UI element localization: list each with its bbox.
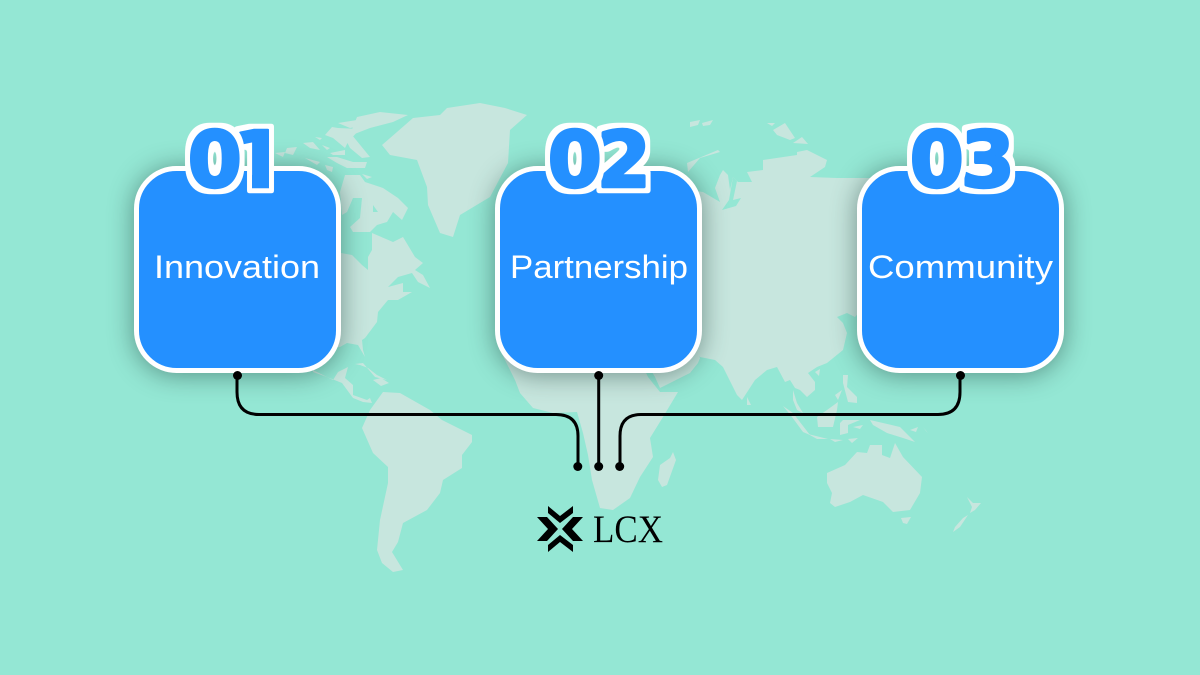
number 0 of 01: 0 bbox=[188, 116, 242, 206]
panel: community bbox=[860, 116, 1062, 370]
label: partnership: Partnership bbox=[510, 249, 688, 285]
number 0 of 03: 0 bbox=[910, 116, 964, 206]
label: community: Community bbox=[868, 249, 1053, 285]
card bbox=[498, 168, 700, 370]
connector: innovation bbox=[237, 375, 578, 466]
logo wordmark: LCX bbox=[593, 508, 663, 551]
number 1 of 01: 1 bbox=[232, 116, 286, 206]
icon: LCX chevrons bbox=[537, 506, 583, 552]
panel: partnership bbox=[498, 116, 700, 370]
logo: LCX bbox=[537, 506, 663, 552]
number 2 of 02: 2 bbox=[597, 116, 651, 206]
card bbox=[136, 168, 338, 370]
world map bbox=[275, 103, 981, 572]
number 3 of 03: 3 bbox=[961, 116, 1015, 206]
number 0 of 02: 0 bbox=[548, 116, 602, 206]
connector dots bbox=[233, 371, 965, 471]
connector lines bbox=[237, 375, 960, 466]
card bbox=[860, 168, 1062, 370]
connector: community bbox=[620, 375, 960, 466]
panel: innovation bbox=[136, 116, 338, 370]
connector: partnership bbox=[597, 375, 600, 466]
label: innovation: Innovation bbox=[154, 249, 320, 285]
